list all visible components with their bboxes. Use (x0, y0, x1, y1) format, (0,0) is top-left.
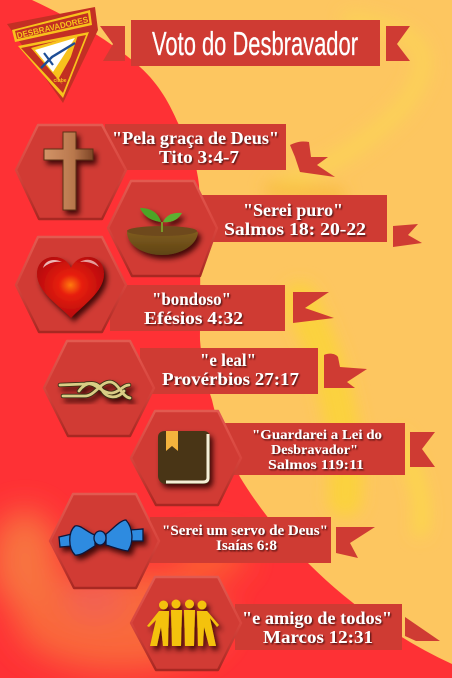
item 5: Guardarei a Lei do Desbravador: "Guardarei a Lei do (252, 428, 382, 443)
ribbon tail (290, 141, 335, 177)
item 1: Pela graça de Deus: Tito 3:4-7 (159, 147, 239, 167)
item 4: e leal: "e leal" (200, 350, 256, 370)
ribbon tail (393, 224, 422, 247)
hexagon (44, 341, 154, 436)
item 6: Serei um servo de Deus: Isaías 6:8 (216, 538, 277, 554)
ribbon tail (293, 292, 334, 323)
item 7: e amigo de todos: "e amigo de todos" (242, 608, 392, 628)
ribbon tail (324, 354, 367, 388)
icon: rope knot (60, 382, 130, 398)
ribbon tail (410, 432, 435, 467)
icon: heart (37, 257, 104, 318)
item 3: bondoso (16, 237, 334, 332)
icon: cross (44, 132, 93, 210)
logo: Desbravadores badge: clube (53, 78, 67, 84)
item 7: e amigo de todos (131, 577, 440, 670)
orange glow (0, 510, 246, 670)
item 2: Serei puro: "Serei puro" (243, 200, 343, 220)
item 3: bondoso: "bondoso" (152, 289, 231, 309)
title banner (100, 20, 410, 66)
icon: bow tie (59, 520, 143, 555)
item 4: e leal (44, 341, 367, 436)
icon: group of people (147, 600, 219, 646)
logo: Desbravadores badge (7, 7, 98, 103)
hexagon (131, 411, 241, 505)
item 2: Serei puro (108, 181, 422, 276)
hexagon (16, 237, 126, 332)
item 4: e leal: Provérbios 27:17 (162, 369, 299, 389)
item 5: Guardarei a Lei do Desbravador: Salmos 119:11 (268, 458, 364, 473)
item 2: Serei puro: Salmos 18: 20-22 (224, 219, 366, 239)
item 1: Pela graça de Deus: "Pela graça de Deus" (112, 128, 279, 148)
hexagon (131, 577, 241, 670)
icon: plant in bowl (127, 208, 198, 255)
hexagon (16, 125, 126, 219)
ribbon tail (405, 617, 440, 641)
item 6: Serei um servo de Deus (50, 494, 375, 588)
icon: book (158, 431, 210, 484)
hexagon (108, 181, 217, 276)
item 5: Guardarei a Lei do Desbravador: Desbravador" (271, 443, 358, 458)
ribbon tail (336, 527, 375, 558)
item 1: Pela graça de Deus (16, 124, 335, 219)
item 6: Serei um servo de Deus: "Serei um servo de Deus" (162, 523, 328, 539)
hexagon (50, 494, 159, 588)
item 3: bondoso: Efésios 4:32 (144, 308, 243, 328)
item 7: e amigo de todos: Marcos 12:31 (263, 627, 373, 647)
logo text: DESBRAVADORES (16, 14, 89, 40)
item 5: Guardarei a Lei do Desbravador (131, 411, 435, 505)
